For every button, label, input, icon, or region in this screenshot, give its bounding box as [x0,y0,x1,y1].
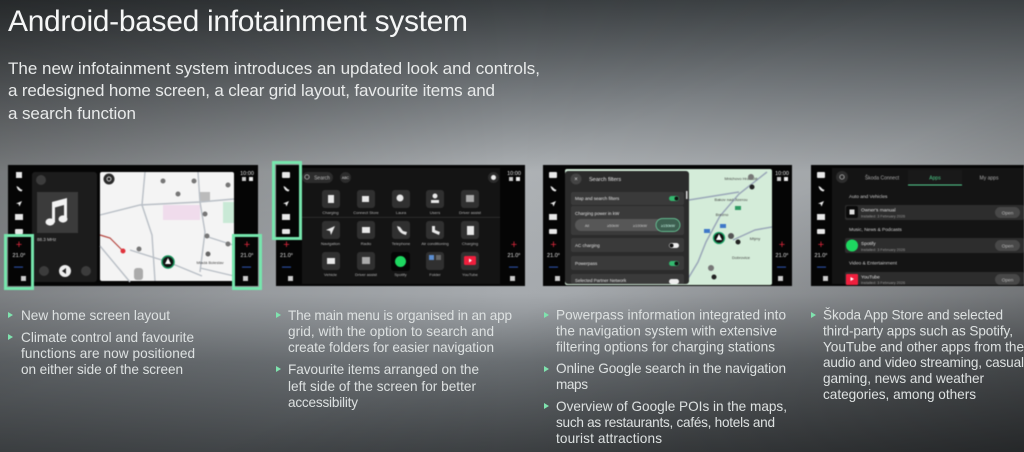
right climate and status [507,171,521,281]
text block: navigation bullets: tourist attractions [556,431,662,446]
text block: app store bullets [811,308,1024,402]
text block: app grid bullets: create folders for easier navigation [288,340,494,355]
search filters panel: Charging power in kW [575,211,620,216]
left climate control: + [16,239,22,251]
search filters panel: × [574,177,578,183]
text block: app grid bullets: left side of the screen for better [288,379,476,394]
left climate control: 21.0° [280,253,293,259]
intro text: The new infotainment system introduces an updated look and controls, [8,59,540,78]
navigation map: Dobrovice [732,255,751,260]
text block: navigation bullets: Online Google search in the navigation [556,361,786,376]
left climate control: 21.0° [547,253,560,259]
search filters panel: Powerpass [575,261,598,266]
sidebar icons [15,172,23,234]
text block: navigation bullets: the navigation system with extensive [556,324,777,338]
right climate and status: + [511,239,517,251]
text block: app store bullets: Škoda App Store and selected [823,308,1003,322]
text block: app store bullets: categories, among others [823,387,976,402]
text block: navigation bullets: Powerpass information integrated into [556,308,786,322]
panel: app grid [274,162,525,286]
text block: app grid bullets: accessibility [288,395,358,410]
text block: home screen bullets: on either side of the screen [21,362,183,377]
search filters panel: Map and search filters [575,196,620,201]
right climate and status [775,171,789,281]
app grid tiles: Radio [361,241,372,246]
text block: app grid bullets [276,308,512,410]
text block: navigation bullets: maps [556,377,588,392]
search filters panel: ≥100kW [633,224,647,228]
tabs: My apps [980,176,999,182]
app list: YouTube [861,274,880,280]
tabs: Apps [929,176,941,182]
app list: Auto and Vehicles [849,194,888,200]
app grid tiles: Connect Store [353,210,380,215]
text block: app grid bullets: The main menu is organised in an app [288,308,512,323]
search filters panel: ≥150kW [661,224,675,228]
app list: Open [1002,244,1014,250]
search filters panel: Search filters [589,177,621,183]
text block: navigation bullets [544,308,787,446]
tabs [836,170,999,186]
left climate control [280,239,293,281]
app grid tiles: Laura [396,210,407,215]
right climate and status: 21.0° [508,253,520,259]
search filters panel: All [585,224,589,228]
text block: navigation bullets: filtering options for charging stations [556,340,775,354]
intro text: a search function [8,104,136,123]
right climate and status: + [244,239,250,251]
left climate control [13,239,26,281]
left climate control [547,239,560,281]
app grid tiles: Charging [322,210,339,215]
right climate and status: 10:00 [507,171,521,177]
left climate control: 21.0° [13,253,25,259]
intro text: a redesigned home screen, a clear grid layout, favourite items and [8,81,495,100]
search filters panel: ≥50kW [607,224,619,228]
left climate control [815,239,828,281]
left climate control: 21.0° [815,253,827,259]
search filters panel: Selected Partner Network [575,278,627,283]
text block: navigation bullets: Overview of Google POIs in the maps, [556,399,787,414]
app list: Video & Entertainment [849,260,898,266]
app grid tiles: Driver assist [459,210,482,215]
app grid tiles: Vehicle [324,272,338,277]
text block: home screen bullets: functions are now positioned [21,346,195,361]
highlight: favourites [274,162,300,238]
text block: app store bullets: YouTube and other apps from the [823,340,1024,354]
text block: home screen bullets: Climate control and favourite [21,330,194,345]
app list: Music, News & Podcasts [849,227,902,233]
panel: home screen [6,165,260,288]
search bar [302,172,499,183]
right climate and status [240,171,254,281]
text block: home screen bullets: New home screen layout [21,308,170,323]
search filters panel [565,171,689,284]
left climate control: + [283,239,290,251]
app grid tiles: Folder [429,272,441,277]
text block: app store bullets: gaming, news and weather [823,371,984,386]
text block: app store bullets: third-party apps such as Spotify, [823,324,1013,338]
text block: app store bullets: audio and video streaming, casual [823,355,1024,370]
right climate and status: 10:00 [775,171,789,177]
text block: home screen bullets [8,308,195,377]
right climate and status: 10:00 [240,171,254,177]
sidebar icons [549,172,557,234]
app grid tiles: Telephone [392,241,411,246]
music card [32,172,97,282]
app grid tiles: Navigation [321,241,340,246]
navigation map [565,169,772,285]
app list: Open [1002,210,1014,216]
sidebar icons [817,172,825,234]
app list: Open [1002,278,1014,284]
app list: Installed: 3 February 2026 [861,214,905,218]
highlight: left climate [6,236,32,288]
music card: 88.3 MHz [37,237,57,242]
map [100,172,234,282]
map: Mladá Boleslav [196,260,224,265]
navigation map: Bakov nad Jizerou [715,197,747,202]
app list: Spotify [861,241,876,247]
app list: Owner's manual [861,208,896,214]
app list: Installed: 3 February 2026 [861,248,905,252]
text block: app grid bullets: grid, with the option to search and [288,324,494,339]
search filters panel: AC charging [575,243,600,248]
panel: app store [811,165,1024,286]
navigation map: Mnichovo Hradiště [724,176,758,181]
app grid tiles [302,190,500,277]
navigation map: Mlýny [750,236,760,241]
app grid tiles: Users [430,210,440,215]
app list [845,194,1024,285]
search bar: ABC [342,176,350,180]
navigation map: Brezno [716,212,729,217]
right climate and status: + [779,239,785,251]
app grid tiles: Air conditioning [421,241,449,246]
app grid tiles: YouTube [462,272,479,277]
app grid tiles: Spotify [394,272,407,277]
app grid tiles: Charging [462,241,478,246]
right climate and status: 21.0° [776,253,788,259]
text block: navigation bullets: such as restaurants, cafés, hotels and [556,415,775,430]
app grid tiles: Driver assist [355,272,378,277]
left climate control: + [818,239,824,251]
left climate control: + [550,239,557,251]
right climate and status: 21.0° [241,253,253,259]
title: Android-based infotainment system [8,5,468,38]
intro text [8,59,540,123]
highlight: right climate [234,236,260,288]
text block: app grid bullets: Favourite items arranged on the [288,362,479,377]
app list: Installed: 3 February 2026 [861,281,905,285]
panel: search filters [543,165,792,286]
tabs: Škoda Connect [865,174,900,182]
sidebar icons [282,172,290,234]
search bar: Search [314,176,330,182]
